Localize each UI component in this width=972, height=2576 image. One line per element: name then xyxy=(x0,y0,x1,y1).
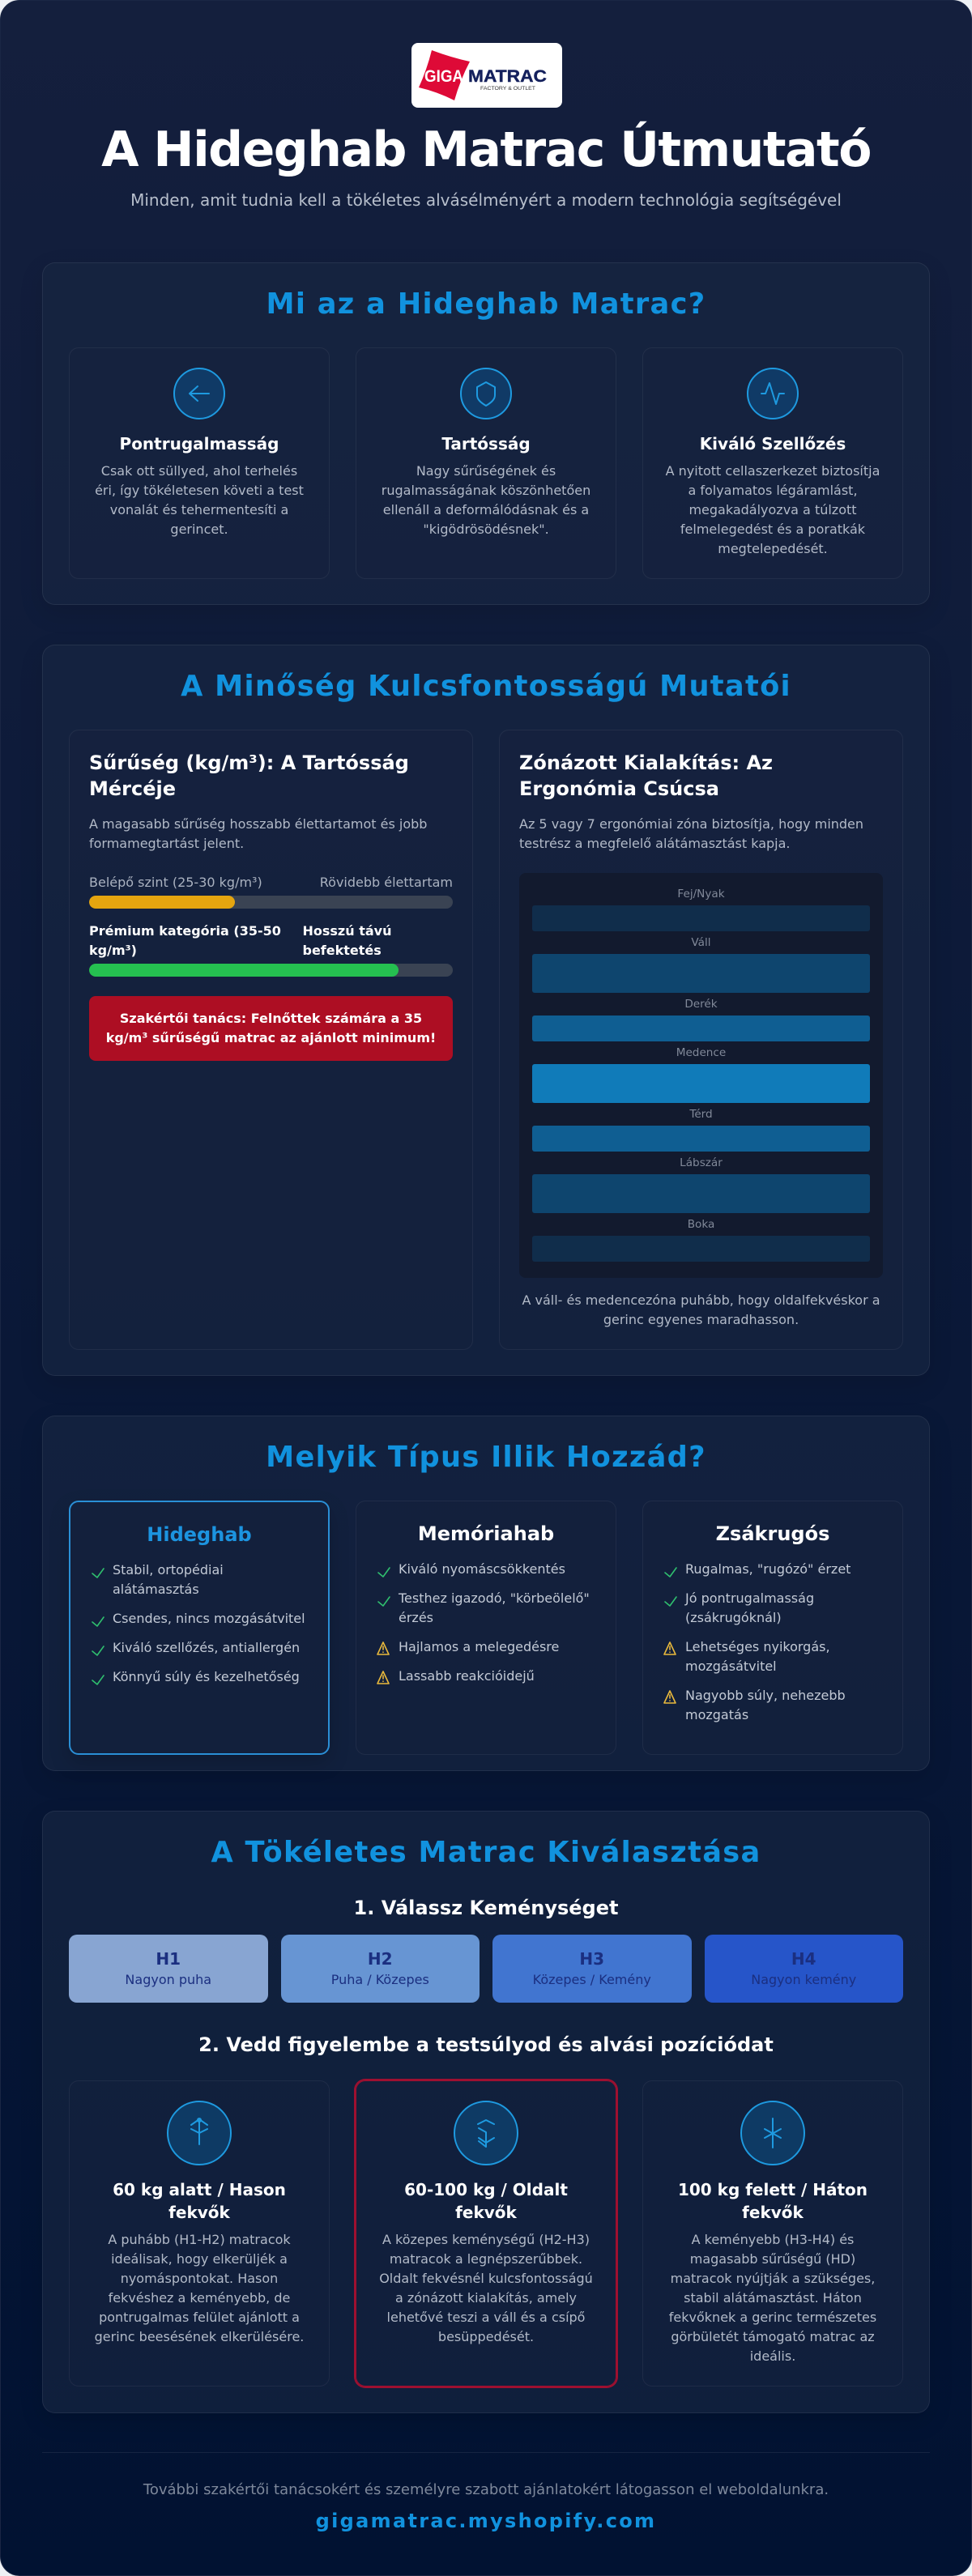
card text xyxy=(379,2232,593,2344)
card: cold foam xyxy=(69,1501,330,1755)
tile H4 xyxy=(705,1935,903,2003)
logo: GIGA xyxy=(424,67,463,86)
card heading: fekvők xyxy=(455,2203,517,2222)
card heading: 60-100 kg / Oldalt xyxy=(404,2180,568,2199)
card text: gerincet. xyxy=(170,522,228,537)
card text: gerinc beesésének elkerülésére. xyxy=(95,2329,304,2344)
panel: choosing the perfect mattress xyxy=(42,1811,930,2413)
zone caption: A váll- és medencezóna puhább, hogy oldalfekvéskor a xyxy=(522,1292,880,1308)
tile H1 xyxy=(69,1935,267,2003)
zone diagram: Fej/Nyak xyxy=(677,888,725,901)
footer link: gigamatrac.myshopify.com xyxy=(316,2510,656,2532)
feature list: érzés xyxy=(399,1610,433,1625)
icon: stomach sleeper xyxy=(167,2101,232,2165)
card text: besüppedését. xyxy=(438,2329,534,2344)
card text: matracok nyújtják a szükséges, xyxy=(671,2271,875,2286)
card heading xyxy=(404,2180,568,2222)
zone diagram: Térd xyxy=(689,1108,713,1121)
card text xyxy=(95,2232,304,2344)
zone caption: gerinc egyenes maradhasson. xyxy=(603,1312,799,1327)
card text: formamegtartást jelent. xyxy=(89,836,244,851)
card text: ideális. xyxy=(750,2348,795,2364)
panel: key quality metrics xyxy=(42,645,930,1376)
heading: Melyik Típus Illik Hozzád? xyxy=(266,1441,706,1474)
logo: MATRAC xyxy=(468,67,547,86)
card text: a zónázott kialakítás, amely xyxy=(395,2290,577,2306)
tile H3: Közepes / Kemény xyxy=(533,1972,651,1987)
card text: ellenáll a deformálódásnak és a xyxy=(383,502,589,517)
card text: magasabb sűrűségű (HD) xyxy=(690,2251,855,2267)
tile H3: H3 xyxy=(579,1949,604,1969)
metric cards xyxy=(69,730,903,1350)
subtitle: Minden, amit tudnia kell a tökéletes alvásélményért a modern technológia segítségével xyxy=(130,190,842,210)
zone diagram: Lábszár xyxy=(680,1156,723,1169)
panel: mattress type comparison xyxy=(42,1416,930,1771)
bar: entry level xyxy=(89,896,453,909)
feature list: mozgásátvitel xyxy=(685,1658,777,1674)
zone diagram: Boka xyxy=(688,1218,714,1231)
feature list: Kiváló nyomáscsökkentés xyxy=(399,1561,565,1577)
card heading: 60 kg alatt / Hason xyxy=(113,2180,286,2199)
card text: rugalmasságának köszönhetően xyxy=(382,483,590,498)
card text: megakadályozva a túlzott xyxy=(688,502,857,517)
card: density xyxy=(69,730,473,1350)
card text: felmelegedést és a poratkák xyxy=(680,522,865,537)
type heading: Hideghab xyxy=(147,1523,252,1546)
firmness scale xyxy=(69,1935,903,2003)
card text: Nagy sűrűségének és xyxy=(416,463,556,479)
card text xyxy=(519,816,863,851)
heading: A Tökéletes Matrac Kiválasztása xyxy=(211,1836,761,1869)
card heading: fekvők xyxy=(742,2203,804,2222)
card: ventilation xyxy=(642,347,903,579)
title: A Hideghab Matrac Útmutató xyxy=(101,121,871,178)
zone caption xyxy=(522,1292,880,1327)
feature list: Lehetséges nyikorgás, xyxy=(685,1639,830,1654)
entry level label: Belépő szint (25-30 kg/m³) xyxy=(89,875,262,890)
card heading xyxy=(678,2180,868,2222)
icon: back sleeper xyxy=(740,2101,805,2165)
feature list: alátámasztás xyxy=(113,1582,199,1597)
feature list xyxy=(377,1561,590,1684)
recommendation cards xyxy=(69,2079,903,2388)
feature list: Stabil, ortopédiai xyxy=(113,1562,224,1578)
card: durability xyxy=(356,347,616,579)
panel: what is cold foam xyxy=(42,262,930,605)
premium label xyxy=(89,923,391,958)
card text: stabil alátámasztást. Háton xyxy=(684,2290,862,2306)
feature list: Nagyobb súly, nehezebb xyxy=(685,1688,846,1703)
card text: megtelepedését. xyxy=(718,541,828,556)
card text xyxy=(382,463,590,537)
card text: Oldalt fekvésnél kulcsfontosságú xyxy=(379,2271,593,2286)
card text xyxy=(666,463,880,556)
card heading: Sűrűség (kg/m³): A Tartósság xyxy=(89,752,409,774)
card heading: fekvők xyxy=(168,2203,230,2222)
card text: A puhább (H1-H2) matracok xyxy=(108,2232,291,2247)
card text: A nyitott cellaszerkezet biztosítja xyxy=(666,463,880,479)
card heading: Ergonómia Csúcsa xyxy=(519,777,719,800)
heading: A Minőség Kulcsfontosságú Mutatói xyxy=(181,670,791,703)
feature list: (zsákrugóknál) xyxy=(685,1610,782,1625)
card: under 60 kg xyxy=(69,2080,330,2387)
feature list: Kiváló szellőzés, antiallergén xyxy=(113,1640,300,1655)
card heading: Zónázott Kialakítás: Az xyxy=(519,752,773,774)
card: spring xyxy=(642,1501,903,1755)
feature list: Rugalmas, "rugózó" érzet xyxy=(685,1561,850,1577)
zone diagram xyxy=(519,873,883,1278)
premium label: Prémium kategória (35-50 xyxy=(89,923,281,939)
feature list: Csendes, nincs mozgásátvitel xyxy=(113,1611,305,1626)
type heading: Zsákrugós xyxy=(716,1522,829,1545)
card text: vonalát és tehermentesíti a xyxy=(110,502,288,517)
card text: ideálisak, hogy elkerüljék a xyxy=(111,2251,288,2267)
icon: pulse xyxy=(747,368,799,419)
card text: A keményebb (H3-H4) és xyxy=(692,2232,854,2247)
zone diagram: Váll xyxy=(691,936,711,949)
card text: testrész a megfelelő alátámasztást kapja. xyxy=(519,836,791,851)
premium label: befektetés xyxy=(303,943,382,958)
card text: A közepes keménységű (H2-H3) xyxy=(382,2232,590,2247)
footer text: További szakértői tanácsokért és személyre szabott ajánlatokért látogasson el weboldalunkra. xyxy=(143,2481,829,2498)
feature list xyxy=(663,1561,850,1722)
card heading xyxy=(89,752,409,800)
feature cards xyxy=(69,347,903,579)
card heading: 100 kg felett / Háton xyxy=(678,2180,868,2199)
tile H2 xyxy=(280,1935,480,2003)
card text: A magasabb sűrűség hosszabb élettartamot és jobb xyxy=(89,816,427,832)
feature list: Könnyű súly és kezelhetőség xyxy=(113,1669,300,1684)
card heading: Mércéje xyxy=(89,777,176,800)
tile H4: Nagyon kemény xyxy=(751,1972,856,1987)
card text xyxy=(89,816,427,851)
tile H1: Nagyon puha xyxy=(125,1972,211,1987)
card heading: Pontrugalmasság xyxy=(120,434,279,453)
feature list: Hajlamos a melegedésre xyxy=(399,1639,559,1654)
tile H2: H2 xyxy=(368,1949,393,1969)
card text: matracok a legnépszerűbbek. xyxy=(390,2251,582,2267)
card heading xyxy=(519,752,773,800)
card text: a folyamatos légáramlást, xyxy=(688,483,858,498)
card text: "kigödrösödésnek". xyxy=(423,522,549,537)
card heading: Tartósság xyxy=(441,434,531,453)
card text: görbületét támogató matrac az xyxy=(671,2329,875,2344)
card: over 100 kg xyxy=(642,2080,903,2387)
card text: lehetővé teszi a váll és a csípő xyxy=(387,2310,585,2325)
heading: Mi az a Hideghab Matrac? xyxy=(266,287,706,321)
bar: premium xyxy=(89,964,453,977)
type heading: Memóriahab xyxy=(418,1522,554,1545)
logo xyxy=(411,43,562,108)
card text: Csak ott süllyed, ahol terhelés xyxy=(101,463,297,479)
card text: éri, így tökéletesen követi a test xyxy=(95,483,304,498)
card: zoning xyxy=(499,730,903,1350)
card: point elasticity xyxy=(69,347,330,579)
feature list: mozgatás xyxy=(685,1707,748,1722)
logo: FACTORY & OUTLET xyxy=(480,86,535,92)
entry level label xyxy=(89,875,453,890)
step 1 heading: 1. Válassz Keménységet xyxy=(354,1897,618,1919)
expert tip: kg/m³ sűrűségű matrac az ajánlott minimum! xyxy=(106,1030,436,1045)
zone diagram: Medence xyxy=(676,1046,726,1059)
icon: side sleeper xyxy=(454,2101,518,2165)
card text: fekvéshez a keményebb, de xyxy=(109,2290,290,2306)
card text: nyomáspontokat. Hason xyxy=(121,2271,278,2286)
card: 60 to 100 kg, highlighted xyxy=(356,2080,616,2387)
expert tip: Szakértői tanács: Felnőttek számára a 35 xyxy=(120,1011,422,1026)
card text xyxy=(669,2232,876,2364)
premium label: kg/m³) xyxy=(89,943,137,958)
feature list: Jó pontrugalmasság xyxy=(685,1590,814,1606)
expert tip xyxy=(89,996,453,1061)
step 2 heading: 2. Vedd figyelembe a testsúlyod és alvási pozíciódat xyxy=(198,2033,774,2056)
feature list xyxy=(92,1562,305,1685)
premium label: Hosszú távú xyxy=(303,923,391,939)
zone diagram: Derék xyxy=(684,998,718,1011)
card heading: Kiváló Szellőzés xyxy=(700,434,846,453)
card text: pontrugalmas felület ajánlott a xyxy=(99,2310,300,2325)
comparison cards xyxy=(69,1501,903,1756)
tile H1: H1 xyxy=(156,1949,181,1969)
entry level label: Rövidebb élettartam xyxy=(320,875,453,890)
card text xyxy=(95,463,304,537)
card: memory foam xyxy=(356,1501,616,1755)
card text: Az 5 vagy 7 ergonómiai zóna biztosítja, hogy minden xyxy=(519,816,863,832)
feature list: Testhez igazodó, "körbeölelő" xyxy=(399,1590,590,1606)
card heading xyxy=(113,2180,286,2222)
tile H2: Puha / Közepes xyxy=(331,1972,429,1987)
icon: arrow xyxy=(173,368,225,419)
icon: shield xyxy=(460,368,512,419)
tile H4: H4 xyxy=(791,1949,816,1969)
feature list: Lassabb reakcióidejű xyxy=(399,1668,535,1684)
card text: fekvőknek a gerinc természetes xyxy=(669,2310,876,2325)
tile H3 xyxy=(492,1935,692,2003)
